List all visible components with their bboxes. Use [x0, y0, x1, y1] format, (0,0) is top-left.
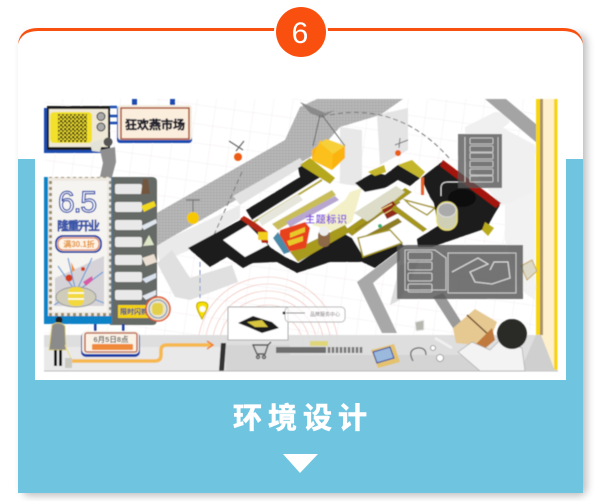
yellow featured tag	[118, 305, 151, 318]
drone: right orange	[395, 138, 408, 156]
date: 6.5	[58, 186, 97, 219]
heading: 环境设计	[233, 402, 373, 435]
callout bubble: 品牌服务中心	[310, 311, 340, 318]
blue lower band	[18, 159, 583, 493]
interior white floors	[250, 178, 440, 263]
dashed routes	[200, 112, 449, 298]
red stair connector	[240, 216, 268, 243]
panel: directory top right	[458, 134, 502, 188]
white stick	[435, 338, 452, 348]
icon: headset	[411, 348, 426, 361]
sign: opening time	[81, 324, 140, 357]
leader line	[441, 182, 465, 196]
bottom counter	[44, 335, 558, 371]
figure: woman in coat	[49, 316, 72, 368]
poster: grand opening	[44, 177, 112, 324]
right black mass lower half	[417, 203, 500, 247]
terminal screen	[228, 307, 288, 340]
number badge	[274, 5, 328, 59]
figure: woman with poster	[90, 138, 116, 177]
discount pill	[56, 236, 101, 252]
ring badge	[146, 297, 170, 321]
small card top right	[521, 260, 537, 280]
drone: yellow cargo	[300, 102, 345, 170]
progress bar	[276, 341, 361, 353]
drone: yellow lower	[186, 200, 200, 224]
panel: grey menu	[110, 177, 170, 325]
sign: opening time: 6月5日8点	[93, 334, 129, 344]
orange top border	[18, 28, 583, 44]
sign: carnival market: 狂欢燕市场	[125, 117, 185, 132]
left and lower black wing	[188, 219, 404, 273]
map pin	[197, 302, 208, 319]
number badge: 6	[292, 17, 308, 50]
menu products	[141, 179, 157, 300]
grid background	[44, 99, 536, 371]
arrow: down	[283, 454, 318, 473]
rings around terminal	[198, 276, 338, 336]
callout bubble	[282, 307, 345, 322]
white picture frame	[35, 90, 566, 380]
opening text: 隆重开业	[57, 218, 100, 233]
upper black band	[246, 163, 322, 220]
grey concrete walls	[155, 99, 537, 333]
yellow featured tag: 限时闪购	[120, 307, 148, 316]
device	[371, 344, 400, 368]
store label: 主题标识	[305, 213, 347, 226]
barrel column	[318, 230, 330, 247]
drone: small orange	[229, 141, 244, 161]
right black mass	[417, 161, 500, 247]
icon: shopping cart	[253, 342, 271, 358]
menu tags	[115, 184, 142, 300]
sign: carnival market	[117, 99, 192, 143]
figure: seated man with box	[453, 309, 527, 371]
small paper	[415, 320, 424, 331]
discount pill: 满30.1折	[63, 239, 95, 249]
TV with QR code	[44, 106, 117, 153]
orange red feature store	[279, 222, 310, 252]
illustration: store environment plan	[43, 98, 558, 372]
middle rooms with olive outlines	[345, 188, 412, 236]
burst illustration	[54, 256, 104, 307]
orange route arrow	[72, 341, 213, 361]
building: floor plan	[188, 158, 501, 273]
upper olive outline	[300, 158, 335, 184]
floors left of centre	[258, 194, 303, 226]
panel: floor map lower right	[397, 245, 523, 299]
top black steps	[355, 165, 420, 192]
right yellow column	[520, 99, 558, 371]
circular atrium	[448, 189, 476, 207]
icon: small objects	[430, 346, 444, 362]
